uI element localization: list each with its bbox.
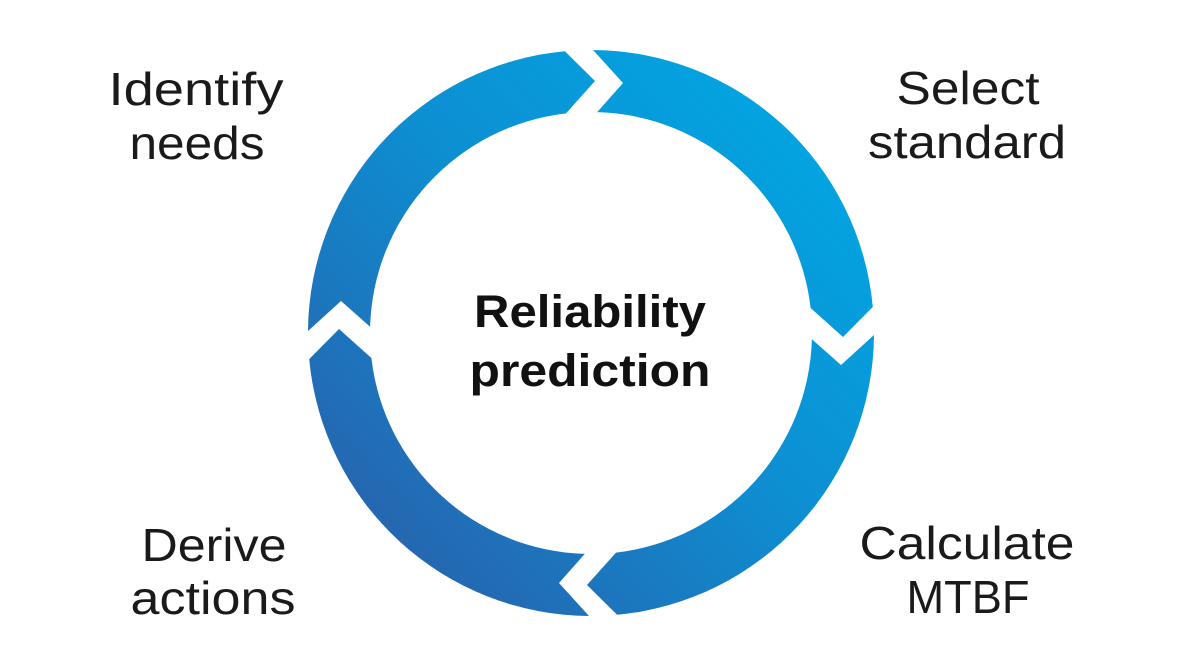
arrow segment: top-left	[308, 51, 595, 331]
center title: prediction	[470, 345, 710, 396]
arrow segment: bottom-right	[587, 335, 874, 615]
ring: cycle arrows	[308, 50, 874, 616]
label: Select standard	[868, 62, 1066, 168]
center title	[470, 286, 710, 396]
label: Calculate MTBF: MTBF	[906, 571, 1030, 623]
label: Identify needs: Identify	[108, 63, 284, 115]
arrow segment: bottom-left	[309, 329, 589, 616]
label: Calculate MTBF: Calculate	[860, 517, 1074, 569]
arrow segment: top-right	[593, 50, 873, 337]
label: Select standard: Select	[896, 62, 1040, 114]
label: Calculate MTBF	[860, 517, 1074, 623]
label: Derive actions: actions	[130, 572, 296, 624]
label: Derive actions: Derive	[142, 519, 286, 571]
label: Identify needs: needs	[130, 117, 264, 169]
center title: Reliability	[474, 286, 706, 337]
label: Select standard: standard	[868, 116, 1066, 168]
label: Derive actions	[130, 519, 296, 624]
label: Identify needs	[108, 63, 284, 169]
